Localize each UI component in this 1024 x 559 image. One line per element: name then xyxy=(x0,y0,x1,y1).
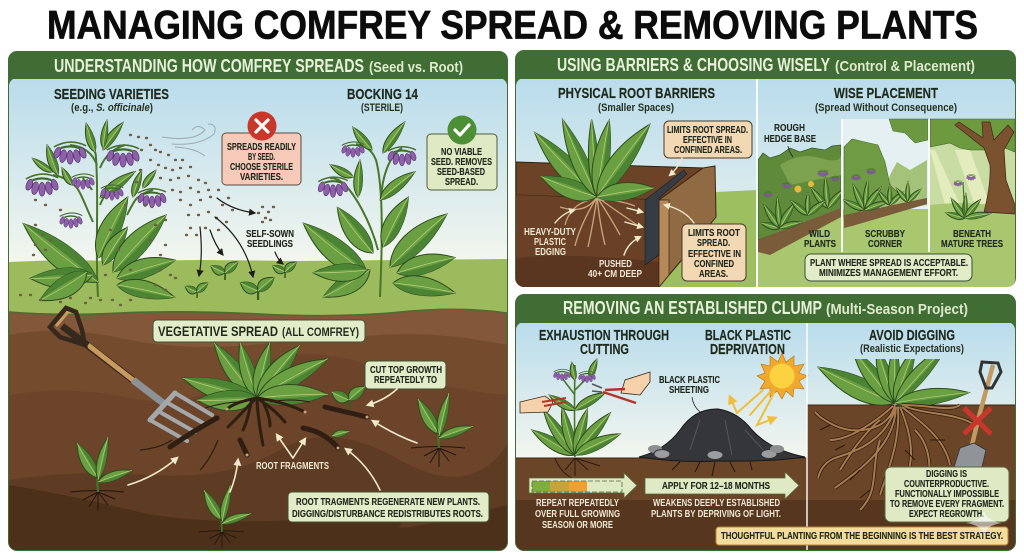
barrier subheadings: PHYSICAL ROOT BARRIERS xyxy=(558,85,715,102)
callout: root fragments regenerate: DIGGING/DISTURBANCE REDISTRIBUTES ROOTS. xyxy=(292,509,483,520)
watermark sparkle xyxy=(966,510,1002,536)
barrier labels: 40+ CM DEEP xyxy=(588,269,642,280)
strip captions: WILD xyxy=(809,229,830,240)
panel 1 scene xyxy=(9,79,507,551)
cutting heading: EXHAUSTION THROUGH xyxy=(539,327,669,344)
callout: cut top growth xyxy=(365,361,446,389)
weakens text xyxy=(651,498,781,520)
callout: digging is counterproductive: EXPECT REGROWTH. xyxy=(909,509,984,520)
black plastic heading: BLACK PLASTIC xyxy=(705,327,791,344)
callout: limits root spread lower: EFFECTIVE IN xyxy=(688,249,741,260)
callout: spreads readily: SPREADS READILY xyxy=(227,142,296,153)
callout: plant where spread acceptable: MINIMIZES MANAGEMENT EFFORT. xyxy=(819,268,958,279)
callout: spreads readily xyxy=(222,133,301,185)
barrier labels: HEAVY-DUTY xyxy=(524,227,576,238)
callout: plant where spread acceptable xyxy=(805,254,972,281)
panel 1 heading: UNDERSTANDING HOW COMFREY SPREADS xyxy=(54,56,364,76)
icon: red cross badge xyxy=(248,112,276,140)
strip captions: PLANTS xyxy=(804,239,836,250)
seeding varieties heading: (e.g., S. officinale) xyxy=(71,102,153,114)
repeat text: REPEAT REPEATEDLY xyxy=(536,498,619,509)
weakens text: WEAKENS DEEPLY ESTABLISHED xyxy=(653,498,780,509)
icon: garden fork xyxy=(50,308,212,441)
callout: limits root spread top: EFFECTIVE IN xyxy=(683,135,732,146)
black plastic heading: DEPRIVATION xyxy=(710,341,785,358)
barrier subheadings: (Smaller Spaces) xyxy=(598,102,674,114)
established clump with roots xyxy=(813,338,975,510)
strip captions: MATURE TREES xyxy=(941,239,1003,250)
panel 2 heading: (Control & Placement) xyxy=(835,58,975,75)
seeding varieties heading xyxy=(54,86,169,114)
callout: limits root spread lower: AREAS. xyxy=(699,269,728,280)
bocking 14 heading: BOCKING 14 xyxy=(347,86,419,103)
panel: removing an established clump xyxy=(515,294,1016,551)
callout: limits root spread lower: CONFINED xyxy=(694,259,734,270)
panel 3 divider xyxy=(806,323,808,550)
repeat text xyxy=(535,498,620,531)
self-sown seedlings label: SEEDLINGS xyxy=(247,239,293,250)
label: vegetative spread xyxy=(153,320,365,342)
wise placement subheadings xyxy=(815,85,957,114)
seed fall arrows xyxy=(199,198,283,277)
callout: cut top growth: CUT TOP GROWTH xyxy=(370,365,442,376)
callout: limits root spread lower: LIMITS ROOT xyxy=(688,228,740,239)
callout: spreads readily: BY SEED. xyxy=(248,152,275,163)
label: vegetative spread: VEGETATIVE SPREAD xyxy=(158,323,278,339)
callout: no viable seed: NO VIABLE xyxy=(441,147,482,158)
callout: limits root spread top: CONFINED AREAS. xyxy=(674,145,742,156)
panel 3 heading: (Multi-Season Project) xyxy=(826,301,968,318)
callout: root fragments regenerate xyxy=(288,492,489,522)
plant: bocking 14 xyxy=(295,119,457,307)
bocking 14 heading xyxy=(347,86,419,114)
callout: limits root spread lower: SPREAD. xyxy=(697,238,730,249)
seeds xyxy=(20,135,274,305)
repeat text: SEASON OR MORE xyxy=(542,520,613,531)
cream arrows xyxy=(128,389,417,492)
bocking 14 heading: (STERILE) xyxy=(361,102,403,114)
callout: no viable seed: SEED-BASED xyxy=(437,167,485,178)
repeat text: OVER FULL GROWING xyxy=(535,509,620,520)
strip captions: BENEATH xyxy=(953,229,991,240)
callout: plant where spread acceptable: PLANT WHERE SPREAD IS ACCEPTABLE. xyxy=(810,258,968,269)
rough hedge base label xyxy=(764,123,816,157)
panel 2 dividers xyxy=(757,79,929,287)
icon: hands with pruners xyxy=(520,372,650,413)
panel 2 heading: USING BARRIERS & CHOOSING WISELY xyxy=(557,55,830,75)
panel 3 heading: REMOVING AN ESTABLISHED CLUMP xyxy=(563,298,822,318)
callout: cut top growth: REPEATEDLY TO xyxy=(374,375,437,386)
barrier subheadings xyxy=(558,85,715,114)
apply duration arrow xyxy=(645,472,799,499)
seeding varieties heading: SEEDING VARIETIES xyxy=(54,86,169,103)
icon: green check badge xyxy=(448,116,476,144)
callout: limits root spread top: LIMITS ROOT SPREAD. xyxy=(667,125,748,136)
callout: digging is counterproductive: DIGGING IS xyxy=(926,469,967,480)
cutting heading xyxy=(539,327,669,358)
strip captions: SCRUBBY xyxy=(865,229,905,240)
callout: spreads readily: VARIETIES. xyxy=(240,172,283,183)
callout: no viable seed xyxy=(427,134,497,190)
weakens text: PLANTS BY DEPRIVING OF LIGHT. xyxy=(651,509,781,520)
callout: limits root spread lower xyxy=(682,224,746,281)
callout: digging is counterproductive: COUNTERPRODUCTIVE. xyxy=(904,479,989,490)
panel 2 scenes xyxy=(516,79,1015,287)
barrier labels: EDGING xyxy=(535,247,566,258)
young sprouts xyxy=(70,392,474,548)
panel: barriers and placement xyxy=(515,50,1016,287)
avoid digging heading: (Realistic Expectations) xyxy=(860,343,964,355)
black plastic sheeting label xyxy=(659,375,720,412)
progress arrow xyxy=(529,473,637,498)
black plastic heading xyxy=(705,327,791,358)
avoid digging heading: AVOID DIGGING xyxy=(869,327,955,344)
callout: no viable seed: SEED. REMOVES xyxy=(431,157,492,168)
self-sown seedlings label: SELF-SOWN xyxy=(246,229,294,240)
callout: digging is counterproductive xyxy=(885,467,1009,522)
apply duration arrow: APPLY FOR 12–18 MONTHS xyxy=(662,481,770,492)
wise placement subheadings: WISE PLACEMENT xyxy=(834,85,938,102)
icon: shovel with red cross xyxy=(954,362,1001,467)
callout: limits root spread top xyxy=(664,121,752,158)
wise placement subheadings: (Spread Without Consequence) xyxy=(815,102,957,114)
strip captions xyxy=(804,229,1003,250)
wind swirl xyxy=(162,124,215,156)
root fragments xyxy=(140,382,368,470)
plant: seeding comfrey xyxy=(14,120,178,310)
black plastic sheeting label: BLACK PLASTIC xyxy=(659,375,720,386)
barrier plant and roots xyxy=(526,117,657,247)
black plastic sheeting label: SHEETING xyxy=(669,385,709,396)
seedlings xyxy=(183,258,298,300)
callout: root fragments regenerate: ROOT TRAGMENTS REGENERATE NEW PLANTS. xyxy=(296,497,480,508)
strip: scrubby corner xyxy=(842,119,928,228)
barrier labels xyxy=(524,227,642,280)
barrier scene xyxy=(516,162,757,287)
cutting plant xyxy=(528,358,622,478)
panel 1 heading: (Seed vs. Root) xyxy=(369,59,463,76)
callout: no viable seed: SPREAD. xyxy=(445,177,478,188)
avoid digging heading xyxy=(860,327,964,355)
reflected sunlight arrows xyxy=(730,390,775,425)
callout: spreads readily: CHOOSE STERILE xyxy=(230,162,293,173)
label: vegetative spread: (ALL COMFREY) xyxy=(282,325,359,339)
strip: hedge base xyxy=(758,145,845,255)
self-sown seedlings label xyxy=(246,229,294,250)
wise placement scene xyxy=(758,119,1015,287)
callout: thoughtful planting xyxy=(716,527,1008,545)
rough hedge base label: ROUGH xyxy=(774,123,805,134)
barrier labels: PLASTIC xyxy=(534,237,566,248)
rough hedge base label: HEDGE BASE xyxy=(764,134,816,145)
panel 3 scene backgrounds xyxy=(516,323,1015,551)
black plastic sheeting mound xyxy=(639,409,805,476)
strip captions: CORNER xyxy=(868,239,903,250)
central underground plant xyxy=(180,338,332,445)
cutting heading: CUTTING xyxy=(580,341,629,358)
strip: beneath mature trees xyxy=(930,118,1015,220)
barrier arrows xyxy=(555,158,694,255)
panel: understanding how comfrey spreads xyxy=(8,51,508,551)
label: root fragments: ROOT FRAGMENTS xyxy=(256,461,329,472)
barrier labels: PUSHED xyxy=(599,259,632,270)
icon: sun xyxy=(757,353,808,399)
